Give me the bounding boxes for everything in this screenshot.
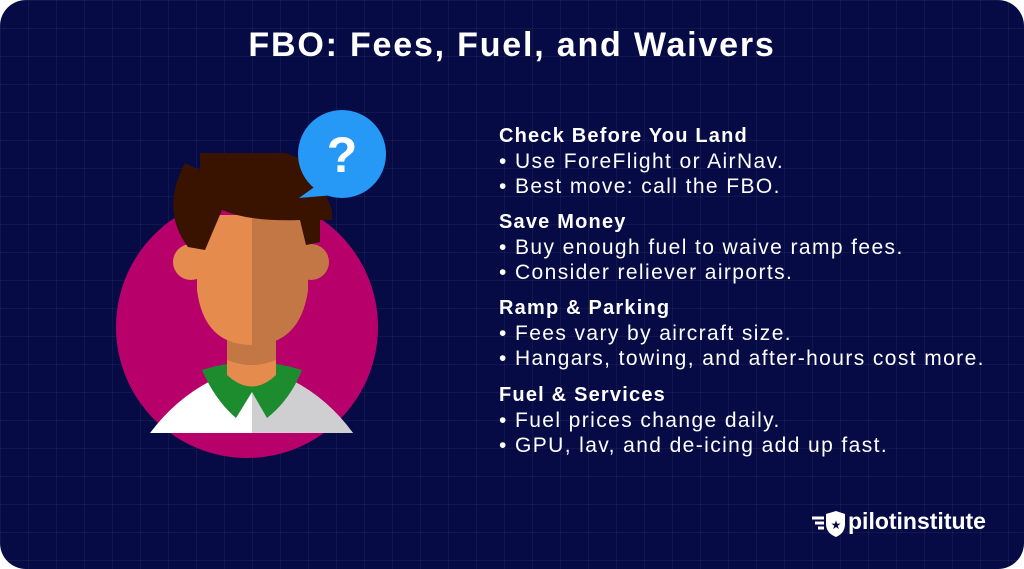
text block: ramp & parking: • Fees vary by aircraft size. (499, 322, 792, 345)
text block: check before you land: • Best move: call the FBO. (499, 175, 781, 198)
ears (173, 244, 209, 280)
text block: save money: • Buy enough fuel to waive ramp fees. (499, 236, 904, 259)
text block: check before you land: Check Before You Land (499, 125, 748, 147)
text block: fuel & services: • GPU, lav, and de-icing add up fast. (499, 434, 888, 457)
text block: fuel & services: • Fuel prices change daily. (499, 409, 781, 432)
speech bubble: ? (327, 127, 357, 183)
text block: save money: Save Money (499, 211, 627, 233)
logo: pilotinstitute (848, 508, 986, 534)
neck (227, 325, 276, 386)
text block: check before you land: • Use ForeFlight or AirNav. (499, 150, 784, 173)
icon: shield wings (812, 511, 845, 537)
shirt (150, 362, 353, 433)
text block: ramp & parking (499, 297, 985, 370)
text block: check before you land (499, 125, 784, 198)
speech bubble (298, 110, 386, 198)
hair (173, 153, 332, 250)
text block: save money (499, 211, 904, 284)
face (197, 215, 308, 345)
icon: shield wings: ★ (831, 518, 841, 532)
text block: ramp & parking: Ramp & Parking (499, 297, 670, 319)
text block: ramp & parking: • Hangars, towing, and after-hours cost more. (499, 347, 985, 370)
background circle (116, 196, 378, 458)
text block: fuel & services (499, 384, 888, 457)
title: FBO: Fees, Fuel, and Waivers (248, 26, 776, 64)
text block: save money: • Consider reliever airports. (499, 261, 793, 284)
text block: fuel & services: Fuel & Services (499, 384, 666, 406)
